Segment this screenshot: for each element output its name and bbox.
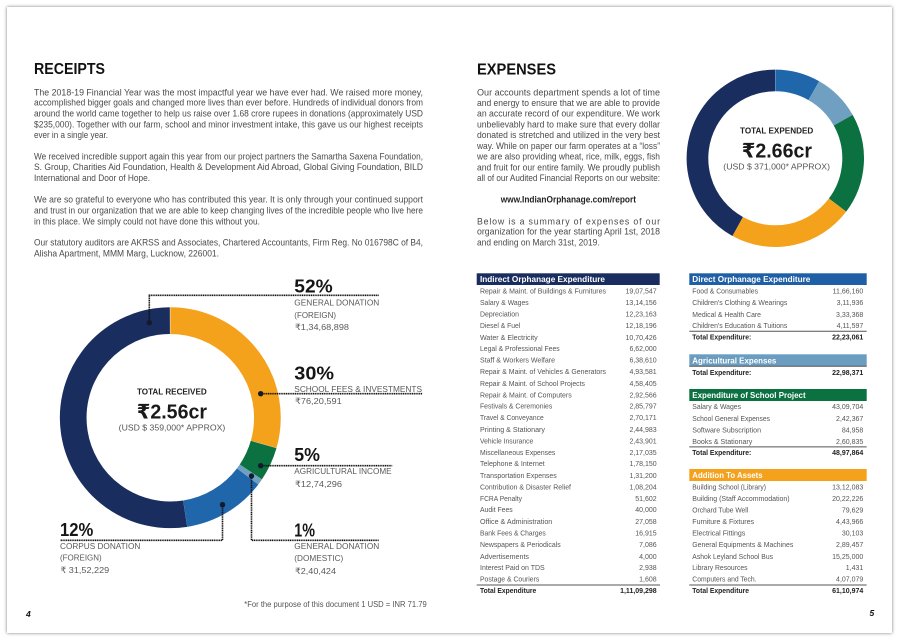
table rows: indirect: 1,608 (639, 576, 657, 584)
table rows: assets: 15,25,000 (832, 554, 863, 561)
table rows: assets: Orchard Tube Well (692, 508, 749, 514)
callout: 12% corpus donation foreign: ₹ 31,52,229 (60, 565, 109, 575)
page number 5: 5 (870, 608, 874, 618)
table rows: assets: Building (Staff Accommodation) (692, 496, 790, 503)
table rows: school project: Salary & Wages (692, 404, 741, 411)
table rows: indirect: Office & Administration (480, 519, 552, 526)
text block: expenses narrative: an accurate record of our expenditure. We work (477, 109, 661, 119)
table total: direct: Total Expenditure: (692, 334, 751, 342)
table rows: indirect: 27,058 (635, 519, 657, 526)
table rows: direct: Food & Consumables (692, 288, 758, 296)
table rows: assets: 20,22,226 (832, 496, 863, 503)
table rows: indirect: Salary & Wages (480, 300, 529, 307)
table rows: indirect: Vehicle Insurance (480, 438, 533, 446)
callout: 52% general donation foreign: (FOREIGN) (294, 310, 336, 320)
table rows: school project: 2,42,367 (836, 416, 863, 423)
footnote: *For the purpose of this document 1 USD = INR 71.79 (244, 600, 427, 609)
table rows: indirect: 4,000 (639, 554, 657, 561)
text block: receipts narrative: S. Group, Charities Aid Foundation, Health & Development Aid Abroad, Global Giving Foundation, BILD (34, 162, 423, 172)
table rows: school project: 43,09,704 (832, 404, 863, 411)
table rows: direct: Medical & Health Care (692, 312, 761, 319)
text block: receipts narrative: in this place. We simply could not have done this without you. (34, 216, 260, 226)
donut chart: total received (34, 282, 306, 554)
table rows: indirect: 6,38,610 (629, 358, 657, 364)
table rows: indirect: 19,07,547 (626, 288, 657, 296)
text block: receipts narrative: around the world came together to help us raise over 1.68 crore rupees in donations (approximately USD (34, 109, 423, 119)
table rows: indirect: Contribution & Disaster Relief (480, 484, 571, 492)
table total: agricultural: Total Expenditure: (692, 370, 751, 377)
callout: 30% school fees and investments: 30% (294, 363, 334, 383)
table total: agricultural (692, 370, 863, 377)
table rows: indirect: 13,14,156 (626, 300, 657, 307)
table rows: indirect (480, 288, 657, 584)
table total: direct: 22,23,061 (832, 334, 863, 342)
text block: expenses narrative: donated is stretched and utilized in the very best (477, 130, 661, 140)
table rows: indirect: 40,000 (635, 507, 657, 514)
table rows: indirect: Travel & Conveyance (480, 415, 544, 422)
table rows: indirect: Diesel & Fuel (480, 323, 521, 330)
table header: direct (689, 273, 867, 285)
callout: 1% general donation domestic: (DOMESTIC) (294, 553, 343, 563)
table total: school project: Total Expenditure: (692, 450, 751, 457)
table header: indirect: Indirect Orphanage Expenditure (480, 275, 606, 284)
donut centre: total received (119, 388, 225, 432)
table rows: indirect: 16,915 (635, 530, 657, 538)
donut centre: total expended: (USD $ 371,000* APPROX) (723, 161, 830, 171)
table rows: indirect: Printing & Stationary (480, 427, 546, 434)
table header: assets (689, 469, 867, 481)
table rows: assets: Computers and Tech. (692, 576, 757, 584)
callout: 1% general donation domestic: ₹2,40,424 (295, 566, 336, 576)
table rows: indirect: FCRA Penalty (480, 496, 522, 503)
callout: 5% agricultural income: AGRICULTURAL INCOME (294, 466, 392, 476)
table rows: indirect: 7,086 (639, 542, 657, 549)
table rows: indirect: 2,43,901 (629, 438, 657, 446)
table total: agricultural: 22,98,371 (832, 370, 863, 377)
table rows: school project (692, 404, 863, 446)
table rows: assets: 4,43,966 (836, 519, 863, 526)
table header: agricultural: Agricultural Expenses (692, 356, 777, 365)
table header: school project (689, 389, 867, 401)
table rows: assets: Furniture & Fixtures (692, 519, 754, 526)
donut centre: total expended: TOTAL EXPENDED (740, 127, 814, 136)
table rows: indirect: Repair & Maint. of School Projects (480, 381, 585, 388)
table rows: indirect: Bank Fees & Charges (480, 530, 546, 538)
table total: indirect: Total Expenditure (480, 588, 536, 595)
donut centre: total expended: ₹2.66cr (742, 140, 812, 162)
table rows: assets: 2,89,457 (836, 542, 863, 549)
callout: 1% general donation domestic: GENERAL DONATION (294, 541, 379, 551)
table header: school project: Expenditure of School Project (692, 391, 806, 400)
table rows: assets: Electrical Fittings (692, 530, 746, 538)
table rows: indirect: 12,23,163 (626, 312, 657, 318)
table rows: assets: Building School (Library) (692, 484, 766, 492)
text block: expenses narrative (476, 88, 661, 247)
table rows: indirect: 4,93,581 (629, 369, 657, 376)
table rows: direct: 3,11,936 (837, 300, 863, 307)
callout: 1% general donation domestic: 1% (294, 521, 315, 541)
table rows: assets: General Equipments & Machines (692, 542, 794, 549)
text block: expenses narrative: way. While on paper our farm operates at a “loss” (476, 141, 660, 151)
table header: direct: Direct Orphanage Expenditure (692, 275, 811, 284)
table rows: assets: 1,431 (846, 565, 863, 572)
table rows: school project: Software Subscription (692, 428, 761, 434)
table rows: indirect: Repair & Maint. of Buildings & Furnitures (480, 288, 606, 296)
table rows: indirect: Staff & Workers Welfare (480, 358, 555, 364)
table total: school project: 48,97,864 (832, 450, 863, 457)
table rows: indirect: 1,78,150 (629, 461, 657, 468)
donut centre: total received: ₹2.56cr (137, 401, 207, 423)
text block: expenses narrative: www.IndianOrphanage.com/report (500, 194, 636, 204)
callout: 52% general donation foreign: GENERAL DONATION (294, 297, 379, 307)
text block: receipts narrative: The 2018-19 Financial Year was the most impactful year we have ever had. We raised more money, (34, 87, 423, 97)
callout: 5% agricultural income: 5% (294, 445, 320, 465)
text block: expenses narrative: Below is a summary of expenses of our (477, 216, 660, 226)
table rows: indirect: Advertisements (480, 554, 529, 561)
table rows: assets: 13,12,083 (832, 484, 863, 492)
table rows: assets: 30,103 (842, 530, 863, 538)
table total: indirect (477, 585, 660, 595)
table rows: indirect: Newspapers & Periodicals (480, 542, 561, 549)
text block: receipts narrative: We received incredible support again this year from our project partners the Samartha Saxena Foundation, (34, 152, 423, 162)
table rows: indirect: 2,938 (639, 565, 657, 572)
table total: school project (689, 447, 867, 457)
table rows: indirect: 10,70,426 (626, 335, 657, 342)
table rows: indirect: Miscellaneous Expenses (480, 450, 556, 457)
table: agricultural expenses (689, 354, 867, 377)
table rows: school project: 2,60,835 (836, 439, 863, 446)
text block: expenses narrative: and ending on March 31st, 2019. (477, 237, 600, 247)
table: indirect orphanage expenditure (477, 273, 660, 595)
table rows: indirect: Depreciation (480, 312, 519, 318)
table rows: indirect: 1,08,204 (629, 484, 657, 492)
text block: receipts narrative: and trust in our organization that we are able to keep changing lives of the incredible people who live here (34, 205, 423, 215)
callout: 12% corpus donation foreign: CORPUS DONATION (60, 541, 140, 551)
heading: expenses: EXPENSES (477, 62, 556, 78)
donut chart: total expended (666, 49, 884, 267)
donut centre: total expended (723, 127, 830, 171)
table rows: indirect: Legal & Professional Fees (480, 346, 560, 353)
callout: 12% corpus donation foreign: (FOREIGN) (60, 552, 102, 562)
table: direct orphanage expenditure (689, 273, 867, 342)
table rows: direct: 11,66,160 (833, 288, 863, 296)
table rows: school project: Books & Stationary (692, 439, 753, 446)
text block: expenses narrative: organization for the year starting April 1st, 2018 (477, 227, 660, 237)
text block: receipts narrative (34, 87, 424, 258)
table total: indirect: 1,11,09,298 (620, 588, 657, 595)
callout: 5% agricultural income (258, 445, 392, 489)
text block: expenses narrative: and energy to ensure that we are able to provide (477, 98, 660, 108)
table header: agricultural (689, 354, 867, 366)
table rows: assets: 4,07,079 (836, 576, 863, 584)
text block: receipts narrative: ever in a single year. (34, 130, 108, 140)
callout: 1% general donation domestic (249, 473, 379, 576)
table rows: assets (692, 484, 863, 584)
table total: assets: Total Expenditure (692, 588, 749, 595)
table header: assets: Addition To Assets (692, 471, 763, 480)
text block: receipts narrative: Alisha Apartment, MMM Marg, Lucknow, 226001. (34, 248, 219, 258)
table rows: indirect: Festivals & Ceremonies (480, 404, 553, 410)
table rows: assets: Library Resources (692, 565, 748, 572)
callout: 52% general donation foreign: ₹1,34,68,898 (295, 322, 349, 332)
table rows: direct (692, 288, 863, 330)
table rows: indirect: Interest Paid on TDS (480, 565, 545, 572)
table rows: indirect: 1,31,200 (629, 473, 657, 480)
page number 4: 4 (25, 609, 31, 619)
table rows: indirect: 2,92,566 (629, 392, 657, 400)
callout: 5% agricultural income: ₹12,74,296 (295, 479, 342, 489)
table rows: assets: 79,629 (842, 508, 863, 514)
table rows: indirect: 2,17,035 (629, 450, 657, 457)
text block: expenses narrative: unbelievably hard to make sure that every dollar (477, 119, 660, 129)
donut centre: total received: TOTAL RECEIVED (137, 388, 207, 397)
callout: 52% general donation foreign: 52% (294, 277, 333, 297)
table rows: indirect: 4,58,405 (629, 381, 657, 388)
donut centre: total received: (USD $ 359,000* APPROX) (119, 422, 225, 432)
table rows: indirect: Telephone & Internet (480, 461, 545, 468)
heading: receipts: RECEIPTS (34, 61, 105, 78)
table: addition to assets (689, 469, 867, 595)
text block: receipts narrative: We are so grateful to everyone who has contributed this year. It is only through your continued support (34, 194, 424, 204)
callout: 30% school fees and investments: ₹76,20,591 (295, 396, 342, 406)
table total: assets: 61,10,974 (832, 588, 863, 595)
table rows: school project: School General Expenses (692, 416, 770, 423)
text block: receipts narrative: $235,000). Together with our farm, school and minor investment intake, this gave us our highest receipts (34, 120, 424, 130)
text block: receipts narrative: accomplished bigger goals and changed more lives than ever before. Hundreds of individual donors from (34, 98, 423, 108)
table rows: indirect: 6,62,000 (629, 346, 657, 353)
callout: 30% school fees and investments (258, 363, 422, 406)
table rows: indirect: Water & Electricity (480, 335, 538, 342)
table rows: indirect: 2,44,983 (629, 427, 657, 434)
table rows: indirect: 51,602 (635, 496, 657, 503)
table: expenditure of school project (689, 389, 867, 457)
callout: 12% corpus donation foreign: 12% (60, 520, 93, 540)
table rows: indirect: 12,18,196 (626, 323, 657, 330)
table total: assets (689, 585, 867, 595)
callout: 52% general donation foreign (147, 277, 379, 332)
text block: receipts narrative: Our statutory auditors are AKRSS and Associates, Chartered Accountants, Firm Reg. No 016798C of B4, (34, 237, 423, 247)
text block: expenses narrative: we are also providing wheat, rice, milk, eggs, fish (476, 152, 660, 162)
text block: receipts narrative: International and Door of Hope. (34, 173, 150, 183)
table rows: assets: Ashok Leyland School Bus (692, 554, 773, 561)
table rows: indirect: Postage & Couriers (480, 576, 540, 584)
table rows: school project: 84,958 (842, 428, 863, 434)
table rows: indirect: Repair & Maint. of Computers (480, 392, 572, 400)
table rows: indirect: 2,85,797 (629, 404, 657, 410)
text block: expenses narrative: and fruit for our entire family. We proudly publish (477, 162, 660, 172)
table rows: indirect: Audit Fees (480, 507, 513, 514)
table rows: indirect: Transportation Expenses (480, 473, 557, 480)
table rows: direct: Children's Education & Tuitions (692, 323, 788, 330)
callout: 30% school fees and investments: SCHOOL FEES & INVESTMENTS (294, 384, 422, 394)
text block: expenses narrative: Our accounts department spends a lot of time (477, 88, 660, 98)
table rows: direct: 3,33,368 (836, 312, 863, 319)
table rows: indirect: 2,70,171 (629, 415, 657, 422)
table header: indirect (477, 273, 660, 285)
text block: expenses narrative: all of our Audited Financial Reports on our website: (477, 173, 660, 183)
table rows: direct: 4,11,597 (837, 323, 863, 330)
table rows: indirect: Repair & Maint. of Vehicles & Generators (480, 369, 606, 376)
table rows: direct: Children's Clothing & Wearings (692, 300, 788, 307)
callout: 12% corpus donation foreign (60, 502, 225, 575)
table total: direct (689, 331, 867, 342)
